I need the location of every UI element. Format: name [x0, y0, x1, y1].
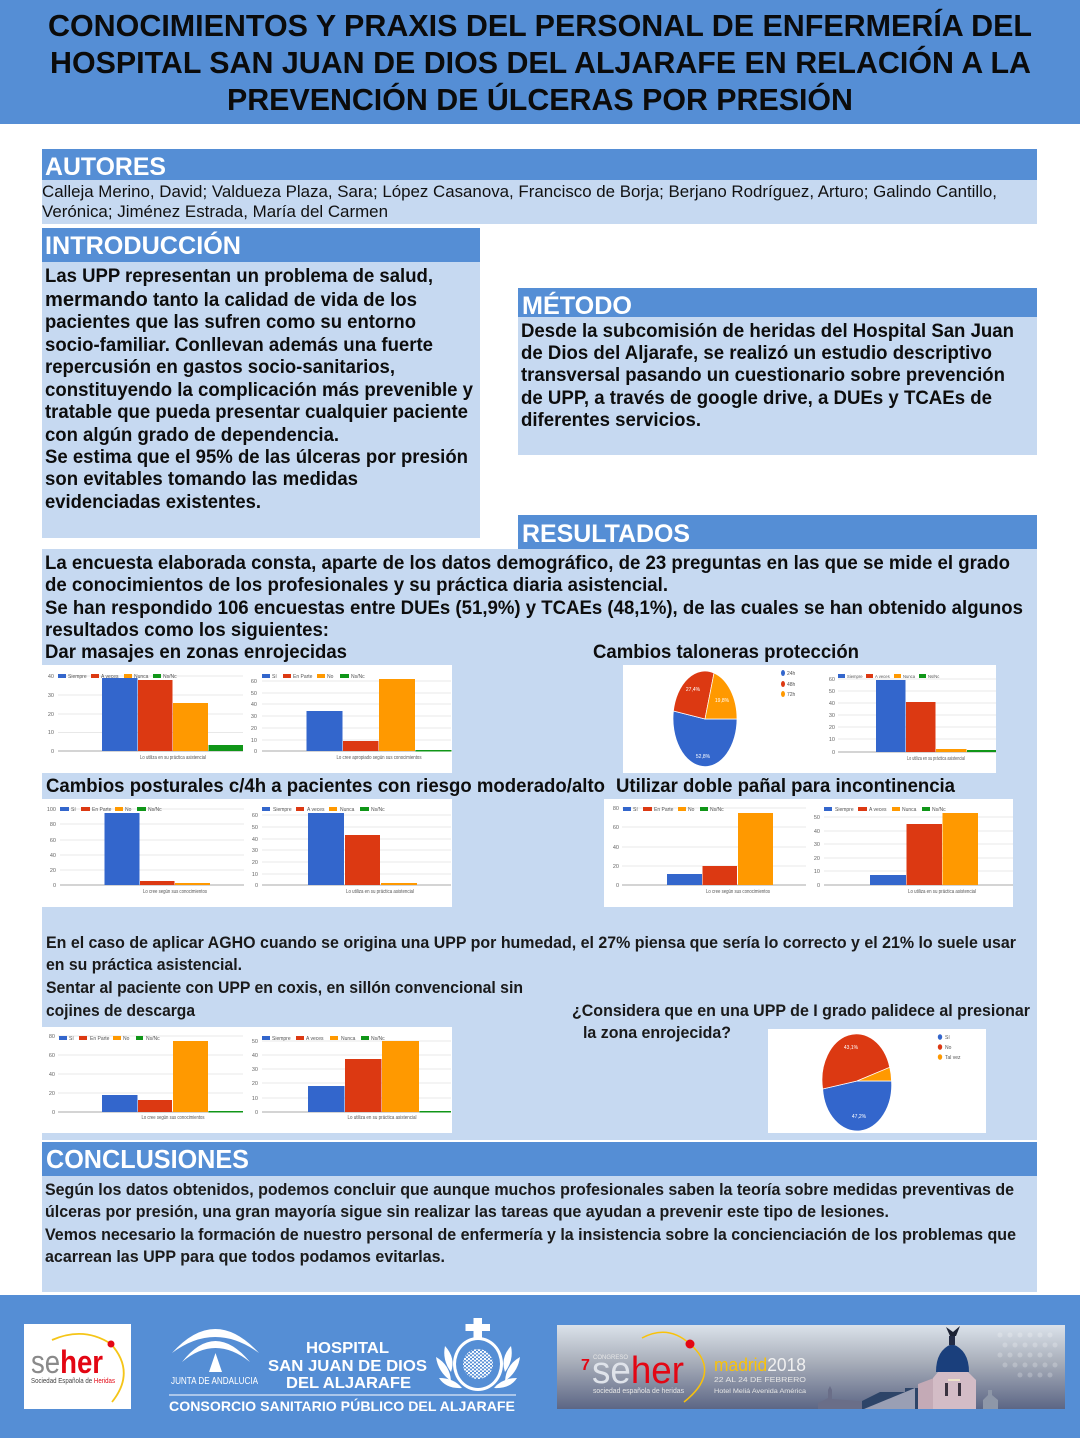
text: AGHO y sillón: cojines de descarga [46, 1001, 195, 1020]
bar chart: uso talonera: Lo utiliza en su práctica asistencial [907, 756, 965, 762]
header band with title: CONOCIMIENTOS Y PRAXIS DEL PERSONAL DE ENFERMERÍA DEL [48, 8, 1032, 43]
bar chart: apropiado según conocimientos: 10 [251, 738, 257, 744]
banner: congreso seher Madrid 2018: 22 AL 24 DE FEBRERO [714, 1377, 807, 1384]
bar chart: uso talonera [829, 674, 996, 762]
heading: doble pañal: Utilizar doble pañal para incontinencia [616, 776, 955, 797]
bar chart: pañal conocimientos: Ns/Nc [710, 807, 724, 813]
panel: método: MÉTODO [522, 291, 632, 320]
bar chart: posturales práctica: 10 [252, 872, 258, 878]
panel: conclusiones: acarrean las UPP para que todos podamos evitarlas. [45, 1247, 445, 1266]
bar chart: posturales práctica [252, 807, 451, 895]
header band with title: HOSPITAL SAN JUAN DE DIOS DEL ALJARAFE EN RELACIÓN A LA [50, 44, 1031, 80]
panel: resultados [42, 515, 1037, 1140]
bar chart: pañal práctica: Siempre [835, 807, 854, 813]
resultados intro text: Se han respondido 106 encuestas entre DUEs (51,9%) y TCAEs (48,1%), de las cuales se han obtenido algunos [45, 598, 1023, 619]
bar chart: pañal práctica: A veces [869, 807, 887, 813]
bar chart: apropiado según conocimientos: Sí [272, 674, 277, 680]
panel: método: transversal pasando un cuestionario sobre prevención [521, 365, 1005, 386]
bar chart: posturales conocimientos: 60 [50, 838, 56, 844]
bar chart: posturales conocimientos: 0 [53, 883, 56, 889]
bar chart: apropiado según conocimientos: 20 [251, 726, 257, 732]
bar chart: sillón práctica: Ns/Nc [371, 1036, 385, 1042]
bar chart: sillón práctica: 50 [252, 1039, 258, 1045]
bar chart: sillón conocimientos: 80 [49, 1034, 55, 1040]
bar chart: apropiado según conocimientos: Lo cree apropiado según sus conocimientos [336, 755, 422, 761]
bar chart: pañal conocimientos: Sí [633, 807, 638, 813]
bar chart: pañal conocimientos: 0 [616, 883, 619, 889]
panel: autores [42, 149, 1037, 224]
bar chart: posturales conocimientos: 80 [50, 822, 56, 828]
bar chart: posturales conocimientos: Sí [71, 807, 76, 813]
pie chart: cambios de talonera: 19,8% [715, 698, 730, 704]
bar chart: sillón conocimientos [49, 1034, 243, 1121]
bar chart: uso en práctica asistencial: Ns/Nc [163, 674, 177, 680]
bar chart: apropiado según conocimientos: En Parte [293, 674, 313, 680]
banner: congreso seher Madrid 2018: Hotel Meliá Avenida América [714, 1388, 806, 1395]
bar chart: sillón práctica: 0 [255, 1110, 258, 1116]
panel: método: diferentes servicios. [521, 410, 701, 431]
bar chart: sillón conocimientos: Sí [69, 1036, 74, 1042]
bar chart: pañal conocimientos: 20 [613, 864, 619, 870]
bar chart: posturales práctica: 50 [252, 825, 258, 831]
bar chart: pañal conocimientos: 60 [613, 825, 619, 831]
bar chart: posturales práctica: 20 [252, 860, 258, 866]
bar chart: posturales práctica: 0 [255, 883, 258, 889]
bar chart: posturales práctica: Siempre [273, 807, 292, 813]
charts: doble pañal [604, 799, 1013, 907]
bar chart: uso en práctica asistencial: Lo utiliza en su práctica asistencial [140, 755, 206, 761]
bar chart: sillón conocimientos: 0 [52, 1110, 55, 1116]
banner: congreso seher Madrid 2018: madrid2018 [714, 1355, 806, 1375]
bar chart: pañal conocimientos: Lo cree según sus conocimientos [706, 889, 770, 895]
panel: conclusiones: CONCLUSIONES [46, 1144, 249, 1174]
bar chart: sillón práctica: Nunca [341, 1036, 356, 1042]
bar chart: sillón conocimientos: 20 [49, 1091, 55, 1097]
banner: congreso seher Madrid 2018: CONGRESO [593, 1354, 628, 1361]
banner: congreso seher Madrid 2018: sociedad española de heridas [593, 1388, 684, 1395]
bar chart: posturales conocimientos: Ns/Nc [148, 807, 162, 813]
bar chart: uso talonera: 50 [829, 689, 835, 695]
bar chart: posturales práctica: 60 [252, 813, 258, 819]
bar chart: uso en práctica asistencial: Siempre [68, 674, 87, 680]
bar chart: pañal conocimientos: 40 [613, 845, 619, 851]
decorative dots [998, 1332, 1058, 1378]
illustration: Metrópolis building [818, 1326, 998, 1409]
panel: introducción: son evitables tomando las medidas [45, 469, 358, 490]
bar chart: posturales conocimientos [47, 807, 244, 895]
logo text: Hospital San Juan de Dios: SAN JUAN DE DIOS [268, 1358, 427, 1375]
pie chart: cambios de talonera: 27,4% [686, 687, 701, 693]
resultados intro text [45, 553, 1023, 641]
bar chart: pañal conocimientos: 80 [613, 806, 619, 812]
bar chart: uso talonera: 0 [832, 750, 835, 756]
bar chart: pañal práctica: 40 [814, 829, 820, 835]
panel: conclusiones: Vemos necesario la formación de nuestro personal de enfermería y la insistencia sobre la concienciación de los problemas que [45, 1225, 1016, 1244]
bar chart: sillón conocimientos: Ns/Nc [146, 1036, 160, 1042]
bar chart: posturales práctica: A veces [307, 807, 325, 813]
bar chart: uso en práctica asistencial [48, 674, 243, 761]
logo text: Hospital San Juan de Dios: HOSPITAL [306, 1340, 389, 1357]
bar chart: apropiado según conocimientos: 50 [251, 691, 257, 697]
bar chart: apropiado según conocimientos: No [327, 674, 334, 680]
pie chart: cambios de talonera: 72h [787, 692, 796, 698]
bar chart: uso talonera: 40 [829, 701, 835, 707]
panel: introducción: Las UPP representan un problema de salud, [45, 266, 433, 287]
logo: Junta de Andalucía [171, 1329, 259, 1387]
text: AGHO y sillón: En el caso de aplicar AGHO cuando se origina una UPP por humedad, el 27% piensa que sería lo correcto y el 21% lo suele usar [46, 933, 1016, 952]
bar chart: posturales conocimientos: 40 [50, 853, 56, 859]
bar chart: apropiado según conocimientos: 40 [251, 702, 257, 708]
bar chart: sillón práctica: Siempre [272, 1036, 291, 1042]
header band with title [0, 0, 1080, 124]
pie chart: palidece: Tal vez [945, 1055, 961, 1061]
bar chart: posturales práctica: Ns/Nc [371, 807, 385, 813]
heading: dar masajes: Dar masajes en zonas enrojecidas [45, 642, 347, 663]
bar chart: sillón conocimientos: No [123, 1036, 130, 1042]
panel: método: de UPP, a través de google drive, a DUEs y TCAEs de [521, 388, 992, 409]
icon: hospital emblem [436, 1318, 520, 1391]
bar chart: sillón conocimientos: En Parte [90, 1036, 110, 1042]
text: AGHO y sillón [46, 933, 1016, 1020]
bar chart: pañal práctica: 30 [814, 842, 820, 848]
bar chart: sillón práctica: A veces [306, 1036, 324, 1042]
pie chart: cambios de talonera: 52,8% [696, 754, 711, 760]
footer band [0, 1295, 1080, 1438]
panel: resultados: RESULTADOS [522, 520, 690, 548]
bar chart: uso en práctica asistencial: 30 [48, 693, 54, 699]
panel: introducción: repercusión en gastos socio-sanitarios, [45, 357, 395, 378]
text: pregunta palidece [572, 1001, 1030, 1042]
logo text: Consorcio Sanitario: CONSORCIO SANITARIO PÚBLICO DEL ALJARAFE [169, 1397, 515, 1414]
panel: conclusiones [42, 1142, 1037, 1292]
header band with title: PREVENCIÓN DE ÚLCERAS POR PRESIÓN [227, 81, 853, 117]
bar chart: sillón práctica [252, 1036, 451, 1121]
bar chart: apropiado según conocimientos: Ns/Nc [351, 674, 365, 680]
panel: autores: Calleja Merino, David; Valdueza Plaza, Sara; López Casanova, Francisco de Borja; Berjano Rodríguez, Arturo; Galindo Cantillo, [42, 182, 997, 201]
bar chart: sillón conocimientos: 60 [49, 1053, 55, 1059]
bar chart: uso en práctica asistencial: 0 [51, 749, 54, 755]
resultados intro text: resultados como los siguientes: [45, 620, 329, 641]
charts: dar masajes [42, 665, 452, 773]
bar chart: sillón conocimientos: 40 [49, 1072, 55, 1078]
bar chart: uso en práctica asistencial: 40 [48, 674, 54, 680]
bar chart: uso talonera: 30 [829, 713, 835, 719]
bar chart: sillón práctica: 10 [252, 1096, 258, 1102]
resultados intro text: de conocimientos de los profesionales y su práctica diaria asistencial. [45, 575, 668, 596]
bar chart: uso talonera: 60 [829, 677, 835, 683]
text: AGHO y sillón: Sentar al paciente con UPP en coxis, en sillón convencional sin [46, 978, 523, 997]
bar chart: pañal práctica: Ns/Nc [932, 807, 946, 813]
bar chart: sillón práctica: 20 [252, 1081, 258, 1087]
panel: autores: Verónica; Jiménez Estrada, María del Carmen [42, 202, 388, 221]
pie chart: palidece [768, 1029, 986, 1133]
bar chart: posturales práctica: 30 [252, 848, 258, 854]
panel: método [518, 288, 1037, 455]
bar chart: posturales práctica: 40 [252, 837, 258, 843]
bar chart: pañal práctica: 50 [814, 815, 820, 821]
bar chart: uso talonera: 10 [829, 737, 835, 743]
pie chart: palidece: No [945, 1045, 952, 1051]
bar chart: posturales conocimientos: No [125, 807, 132, 813]
bar chart: posturales conocimientos: Lo cree según sus conocimientos [143, 889, 207, 895]
bar chart: uso talonera: Nunca [903, 674, 916, 679]
bar chart: apropiado según conocimientos: 0 [254, 749, 257, 755]
heading: cambios taloneras: Cambios taloneras protección [593, 642, 859, 663]
pie chart: cambios de talonera: 48h [787, 682, 796, 688]
text: pregunta palidece: la zona enrojecida? [583, 1023, 731, 1042]
panel: autores: AUTORES [45, 153, 166, 181]
bar chart: apropiado según conocimientos: 60 [251, 679, 257, 685]
bar chart: posturales práctica: Lo utiliza en su práctica asistencial [346, 889, 414, 895]
logo: seher [24, 1324, 131, 1409]
panel: conclusiones: úlceras por presión, una gran mayoría sigue sin realizar las tareas que ayudan a prevenir este tipo de lesiones. [45, 1202, 889, 1221]
bar chart: pañal conocimientos: No [688, 807, 695, 813]
panel: conclusiones: Según los datos obtenidos, podemos concluir que aunque muchos profesionales saben la teoría sobre medidas preventivas de [45, 1180, 1014, 1199]
resultados intro text: La encuesta elaborada consta, aparte de los datos demográfico, de 23 preguntas en las que se mide el grado [45, 553, 1010, 574]
panel: introducción: socio-familiar. Conllevan además una fuerte [45, 335, 433, 356]
pie chart: palidece: 43,1% [844, 1045, 859, 1051]
bar chart: posturales conocimientos: En Parte [92, 807, 112, 813]
bar chart: pañal práctica: Nunca [902, 807, 917, 813]
bar chart: sillón práctica: Lo utiliza en su práctica asistencial [348, 1115, 416, 1121]
panel: introducción: pacientes que las sufren como su entorno [45, 312, 416, 333]
bar chart: uso talonera: Ns/Nc [928, 674, 939, 679]
charts: taloneras [623, 665, 996, 773]
panel: introducción: evidenciadas existentes. [45, 492, 261, 513]
text: AGHO y sillón: en su práctica asistencial. [46, 955, 242, 974]
bar chart: uso en práctica asistencial: 20 [48, 712, 54, 718]
bar chart: uso talonera: Siempre [847, 674, 863, 679]
banner: congreso seher Madrid 2018: seher [592, 1350, 684, 1392]
bar chart: uso talonera: A veces [875, 674, 890, 679]
bar chart: uso en práctica asistencial: Nunca [134, 674, 149, 680]
panel: método: de Dios del Aljarafe, se realizó un estudio descriptivo [521, 343, 992, 364]
banner: congreso seher Madrid 2018 [557, 1325, 1065, 1409]
panel: introducción [42, 228, 480, 538]
charts: cambios posturales [42, 799, 452, 907]
bar chart: posturales conocimientos: 20 [50, 868, 56, 874]
banner: congreso seher Madrid 2018: 7 [581, 1357, 590, 1374]
panel: introducción: tratable que pueda presentar cualquier paciente [45, 402, 468, 423]
bar chart: uso en práctica asistencial: 10 [48, 730, 54, 736]
pie chart: cambios de talonera: 24h [787, 671, 796, 677]
bar chart: pañal práctica: 20 [814, 856, 820, 862]
panel: introducción: INTRODUCCIÓN [45, 230, 241, 260]
bar chart: pañal práctica: Lo utiliza en su práctica asistencial [908, 889, 976, 895]
panel: introducción: Se estima que el 95% de las úlceras por presión [45, 447, 468, 468]
bar chart: uso talonera: 20 [829, 725, 835, 731]
pie chart: palidece: Sí [945, 1035, 950, 1041]
panel: método: Desde la subcomisión de heridas del Hospital San Juan [521, 321, 1014, 342]
bar chart: uso en práctica asistencial: A veces [101, 674, 119, 680]
bar chart: posturales conocimientos: 100 [47, 807, 56, 813]
bar chart: pañal práctica [814, 807, 1013, 895]
bar chart: pañal práctica: 10 [814, 869, 820, 875]
logo: seher: seher [31, 1344, 103, 1380]
bar chart: sillón práctica: 40 [252, 1053, 258, 1059]
text: pregunta palidece: ¿Considera que en una UPP de I grado palidece al presionar [572, 1001, 1030, 1020]
bar chart: pañal conocimientos [613, 806, 806, 895]
bar chart: sillón conocimientos: Lo cree según sus conocimientos [142, 1115, 205, 1121]
bar chart: apropiado según conocimientos [251, 674, 452, 761]
panel: introducción: con algún grado de dependencia. [45, 425, 339, 446]
bar chart: pañal práctica: 0 [817, 883, 820, 889]
charts: sillón [42, 1027, 452, 1133]
divider [169, 1394, 516, 1396]
panel: introducción: mermando tanto la calidad de vida de los [45, 288, 417, 311]
logo text: Hospital San Juan de Dios [268, 1340, 427, 1392]
logo: seher: Sociedad Española de Heridas [31, 1376, 115, 1385]
bar chart: apropiado según conocimientos: 30 [251, 714, 257, 720]
bar chart: posturales práctica: Nunca [340, 807, 355, 813]
heading: cambios posturales: Cambios posturales c/4h a pacientes con riesgo moderado/alto [46, 776, 605, 797]
logo: Junta de Andalucía: JUNTA DE ANDALUCIA [171, 1376, 258, 1387]
bar chart: sillón práctica: 30 [252, 1067, 258, 1073]
logo text: Hospital San Juan de Dios: DEL ALJARAFE [286, 1375, 411, 1392]
panel: introducción: constituyendo la complicación más prevenible y [45, 380, 473, 401]
pie chart: cambios de talonera [673, 670, 796, 767]
pie chart: palidece: 47,2% [852, 1114, 867, 1120]
bar chart: pañal conocimientos: En Parte [654, 807, 674, 813]
